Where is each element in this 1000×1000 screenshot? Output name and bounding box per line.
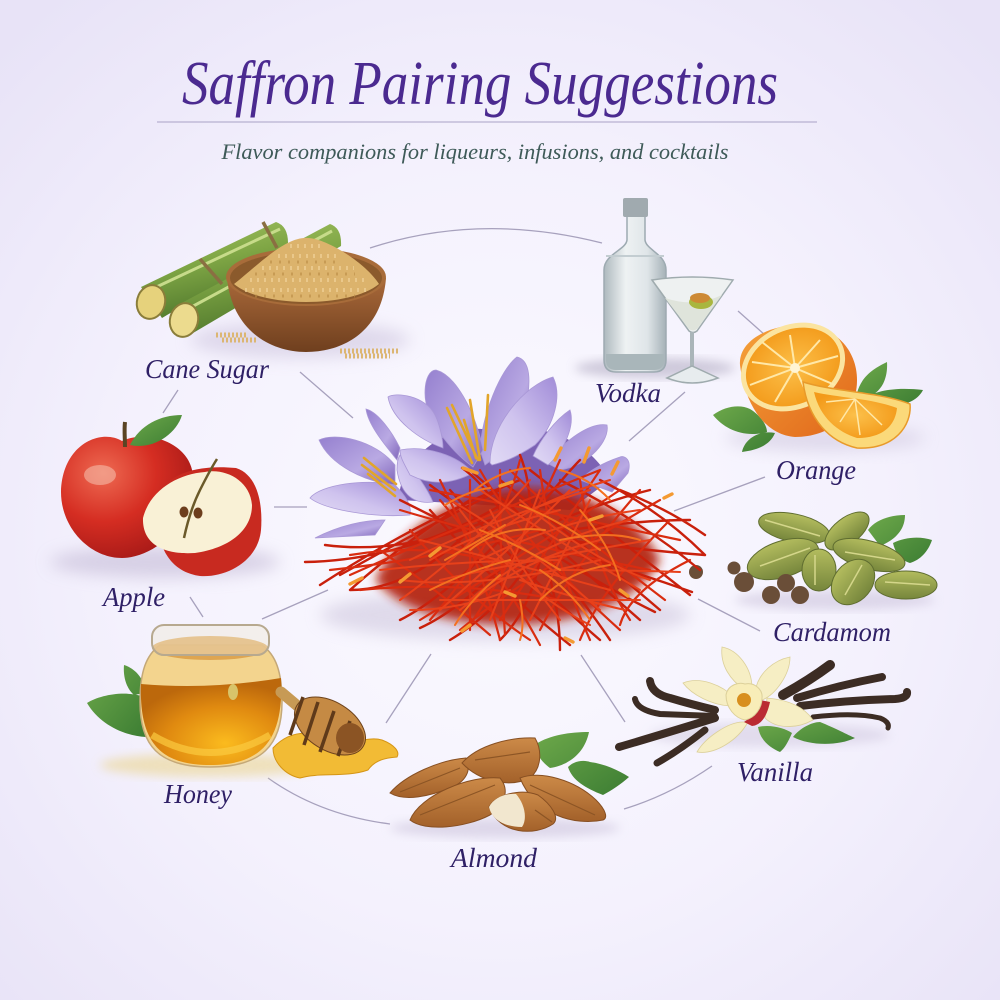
icon: apple — [50, 415, 280, 578]
connector lines — [163, 229, 765, 824]
flower center backing — [400, 427, 610, 510]
label: vanilla: Vanilla — [737, 757, 813, 787]
icon: cardamom — [689, 505, 937, 613]
stamens — [362, 395, 488, 496]
label: orange: Orange — [776, 455, 856, 485]
label: apple: Apple — [101, 582, 165, 612]
icon: vodka and martini glass — [575, 198, 735, 383]
subtitle: Flavor companions for liqueurs, infusions, and cocktails — [220, 139, 728, 164]
thread mass base — [375, 488, 660, 625]
icon: orange — [713, 306, 925, 452]
saffron threads — [305, 448, 705, 650]
icon: vanilla — [619, 647, 907, 763]
saffron flower petals — [310, 357, 629, 538]
title: Saffron Pairing Suggestions — [182, 50, 778, 118]
label: cane sugar: Cane Sugar — [145, 354, 269, 384]
label: cardamom: Cardamom — [773, 617, 891, 647]
centerpiece: saffron flower and threads — [305, 357, 705, 650]
icon: honey jar with dipper — [87, 625, 398, 778]
icon: almond — [390, 732, 629, 838]
label: vodka: Vodka — [595, 378, 661, 408]
label: honey: Honey — [163, 779, 232, 809]
label: almond: Almond — [449, 843, 538, 873]
icon: cane sugar — [133, 222, 410, 358]
